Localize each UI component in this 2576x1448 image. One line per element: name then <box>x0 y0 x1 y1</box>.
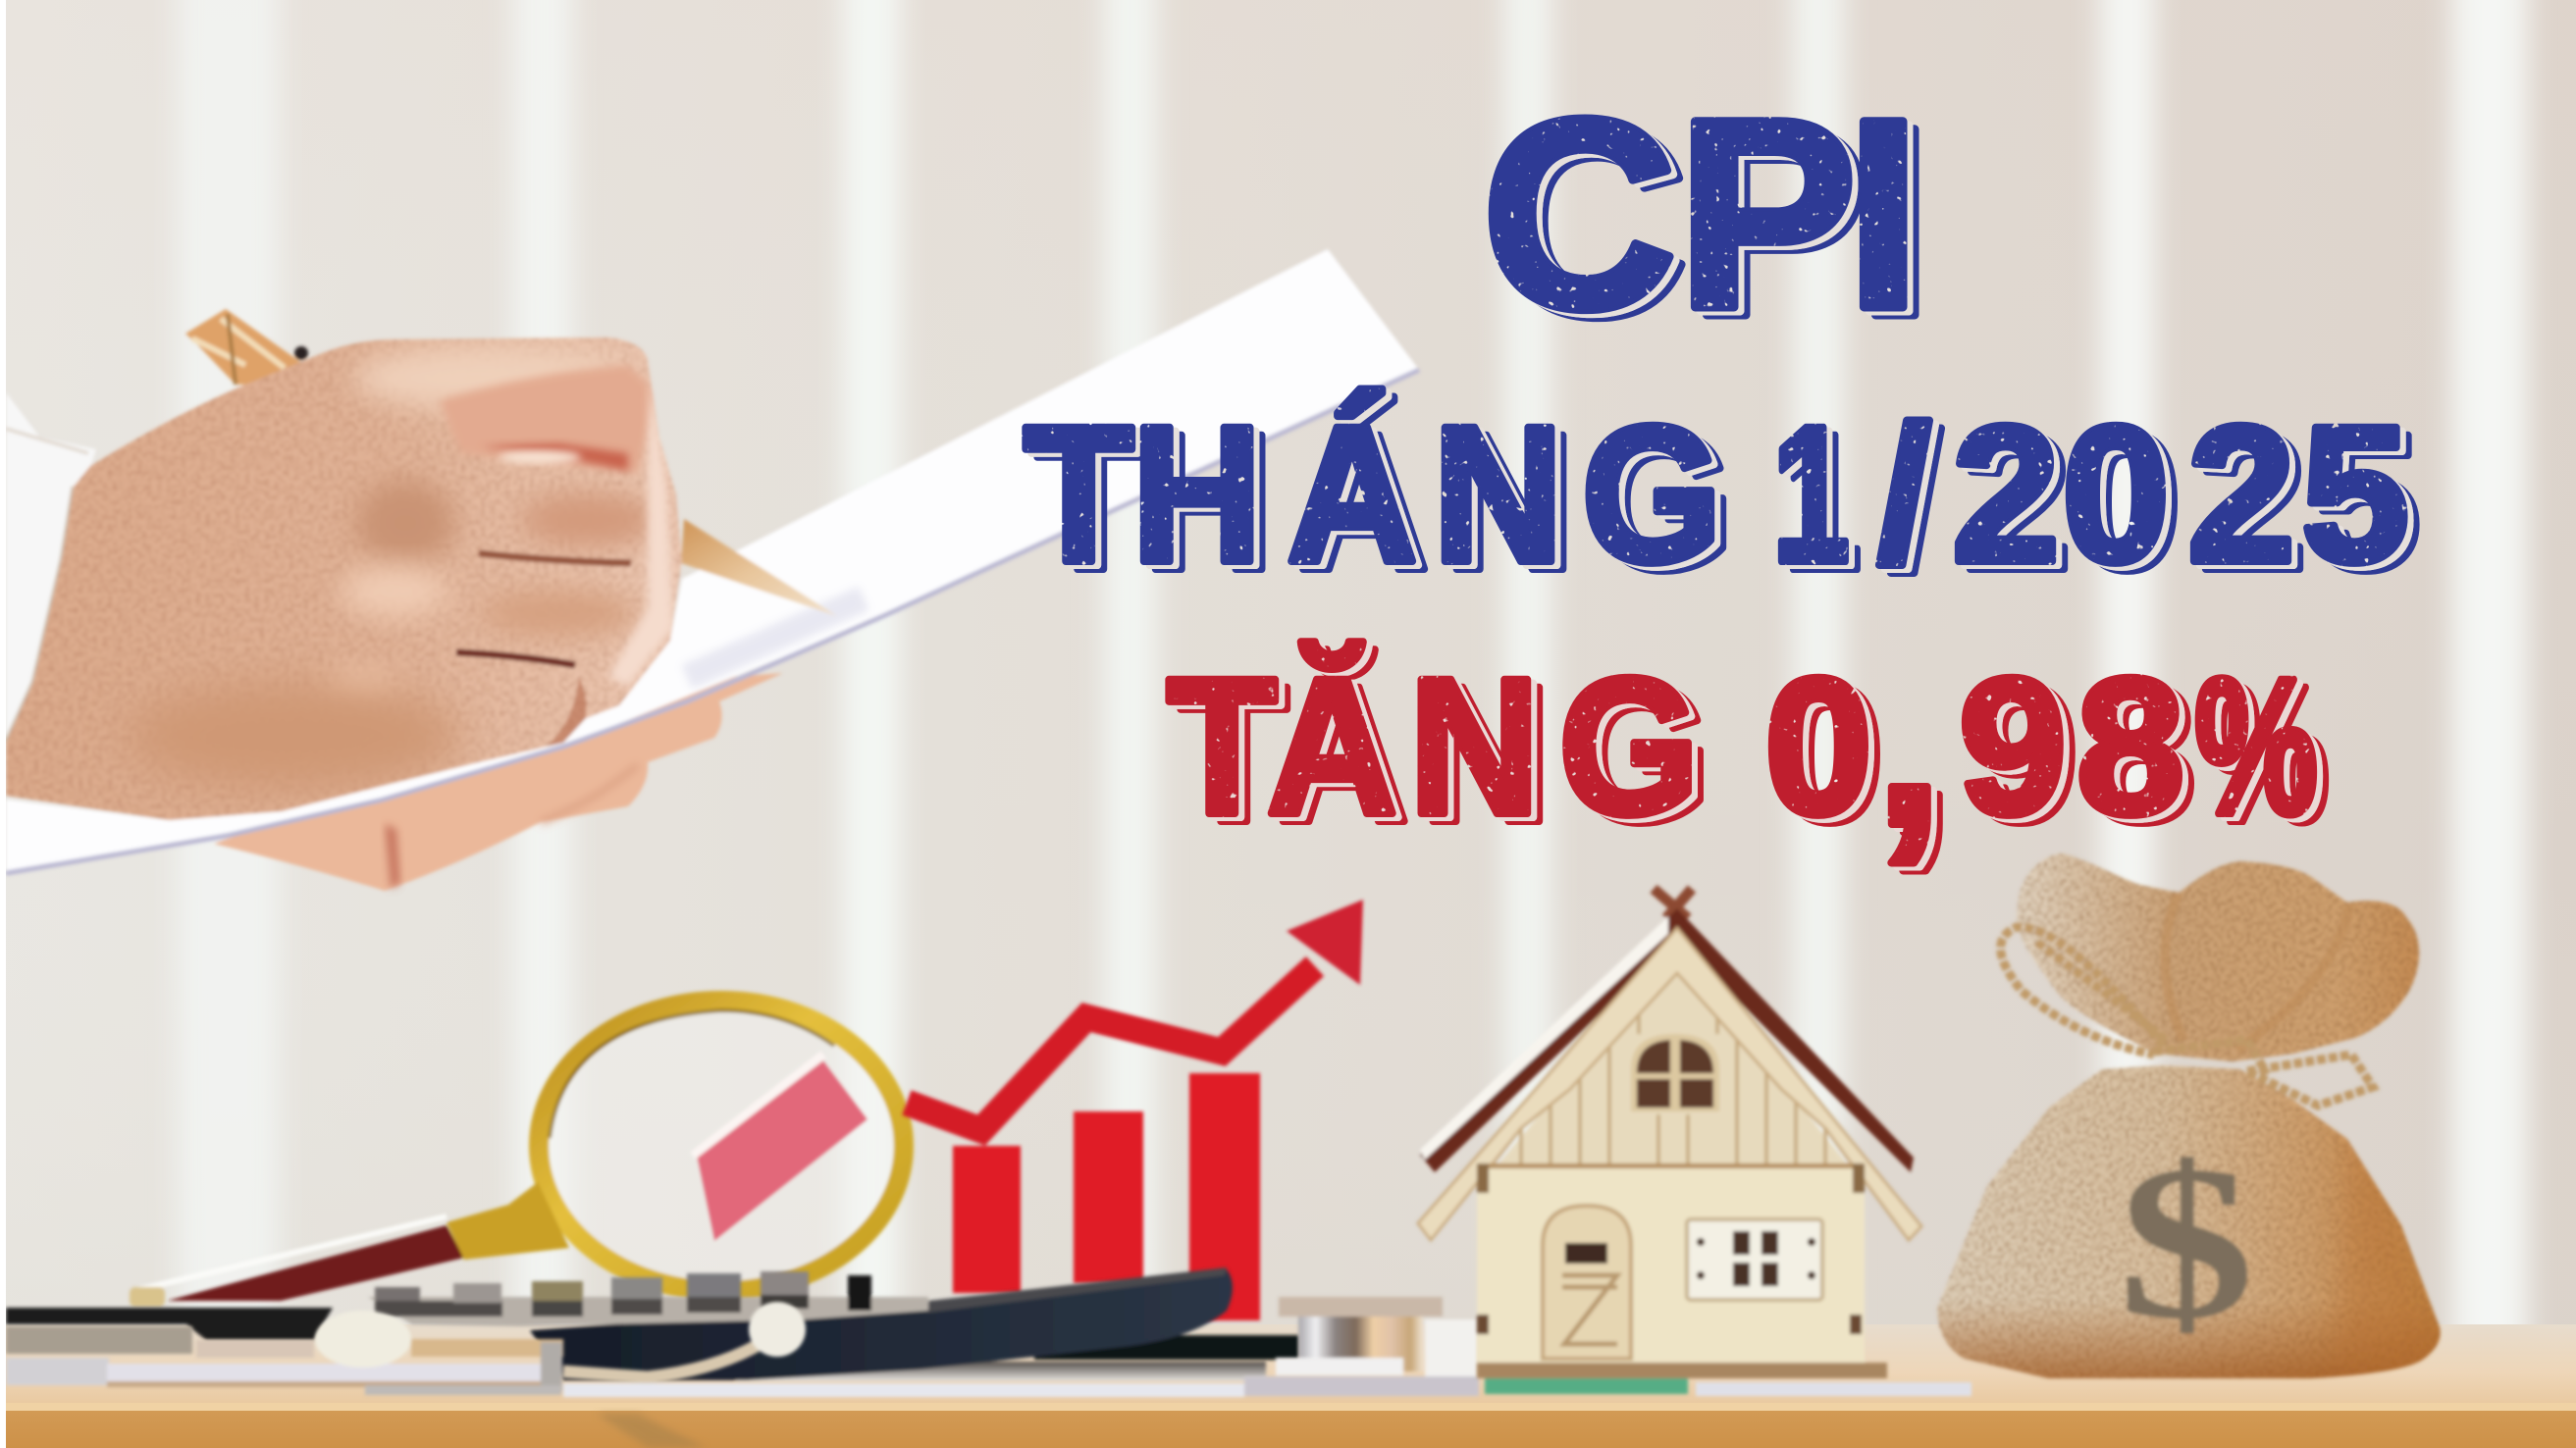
dollar sign: $ <box>2118 1119 2255 1365</box>
roof <box>1420 908 1914 1172</box>
handle <box>167 1225 464 1301</box>
lens ring <box>539 1001 904 1291</box>
red sheet seen through the lens <box>697 1060 867 1241</box>
shirt cuff <box>6 392 96 743</box>
headline: TĂNG 0,98%: 0 <box>1764 638 1872 854</box>
lower window <box>1687 1219 1822 1300</box>
title: THÁNG 1/2025: THÁNG <box>1024 386 1722 602</box>
title: THÁNG 1/2025: /2025 <box>1877 386 2409 602</box>
bars <box>953 1073 1260 1320</box>
upper window <box>1631 1034 1719 1112</box>
arrow line <box>907 966 1315 1130</box>
magnifying glass <box>130 1001 904 1307</box>
walls <box>1477 1166 1865 1363</box>
bag folds <box>2165 893 2350 1050</box>
barge boards <box>1418 928 1921 1240</box>
bag top <box>2017 853 2419 1061</box>
tube <box>107 1334 775 1395</box>
headline: TĂNG 0,98%: , <box>1874 598 1944 878</box>
body <box>530 1269 1233 1380</box>
title: CPI: CPI <box>1482 64 1920 365</box>
gable wall <box>1497 950 1849 1166</box>
pen nib <box>681 519 837 616</box>
arrow head <box>1287 900 1363 985</box>
ferrule <box>447 1182 569 1260</box>
wooden house model <box>1418 889 1971 1396</box>
stethoscope <box>6 1297 1479 1397</box>
red growth chart <box>907 900 1363 1320</box>
silver key deck <box>368 1297 928 1326</box>
headline: TĂNG 0,98%: 98 <box>1959 638 2184 854</box>
ear tips <box>315 1302 806 1368</box>
door <box>1543 1206 1631 1359</box>
left metal fitting <box>6 1326 314 1385</box>
keys <box>375 1271 871 1317</box>
photo: hand writing on paper <box>0 249 1419 891</box>
paper sheet <box>6 249 1419 873</box>
title: THÁNG 1/2025: 1 <box>1772 386 1850 602</box>
burlap money bag <box>1923 853 2453 1383</box>
black band behind <box>6 1308 333 1340</box>
document on table <box>563 1383 1244 1397</box>
headline: TĂNG 0,98%: TĂNG <box>1167 638 1700 854</box>
calculator <box>6 1267 1299 1381</box>
ridge cross <box>1654 889 1692 918</box>
bag body <box>1923 1050 2453 1383</box>
white card behind house <box>1425 1319 1478 1376</box>
title: THÁNG 1/2025 <box>1024 386 2409 602</box>
left white margin <box>0 0 6 1448</box>
lens glass <box>549 1007 898 1285</box>
headline: TĂNG 0,98% <box>1167 598 2318 878</box>
rope <box>2001 927 2373 1106</box>
base and mat <box>1477 1363 1887 1378</box>
writing hand <box>0 324 707 834</box>
chest piece <box>1244 1297 1479 1396</box>
lower hand under the paper <box>214 595 783 891</box>
pen cap <box>185 309 310 385</box>
table <box>0 1324 2576 1448</box>
headline: TĂNG 0,98%: % <box>2194 638 2318 854</box>
